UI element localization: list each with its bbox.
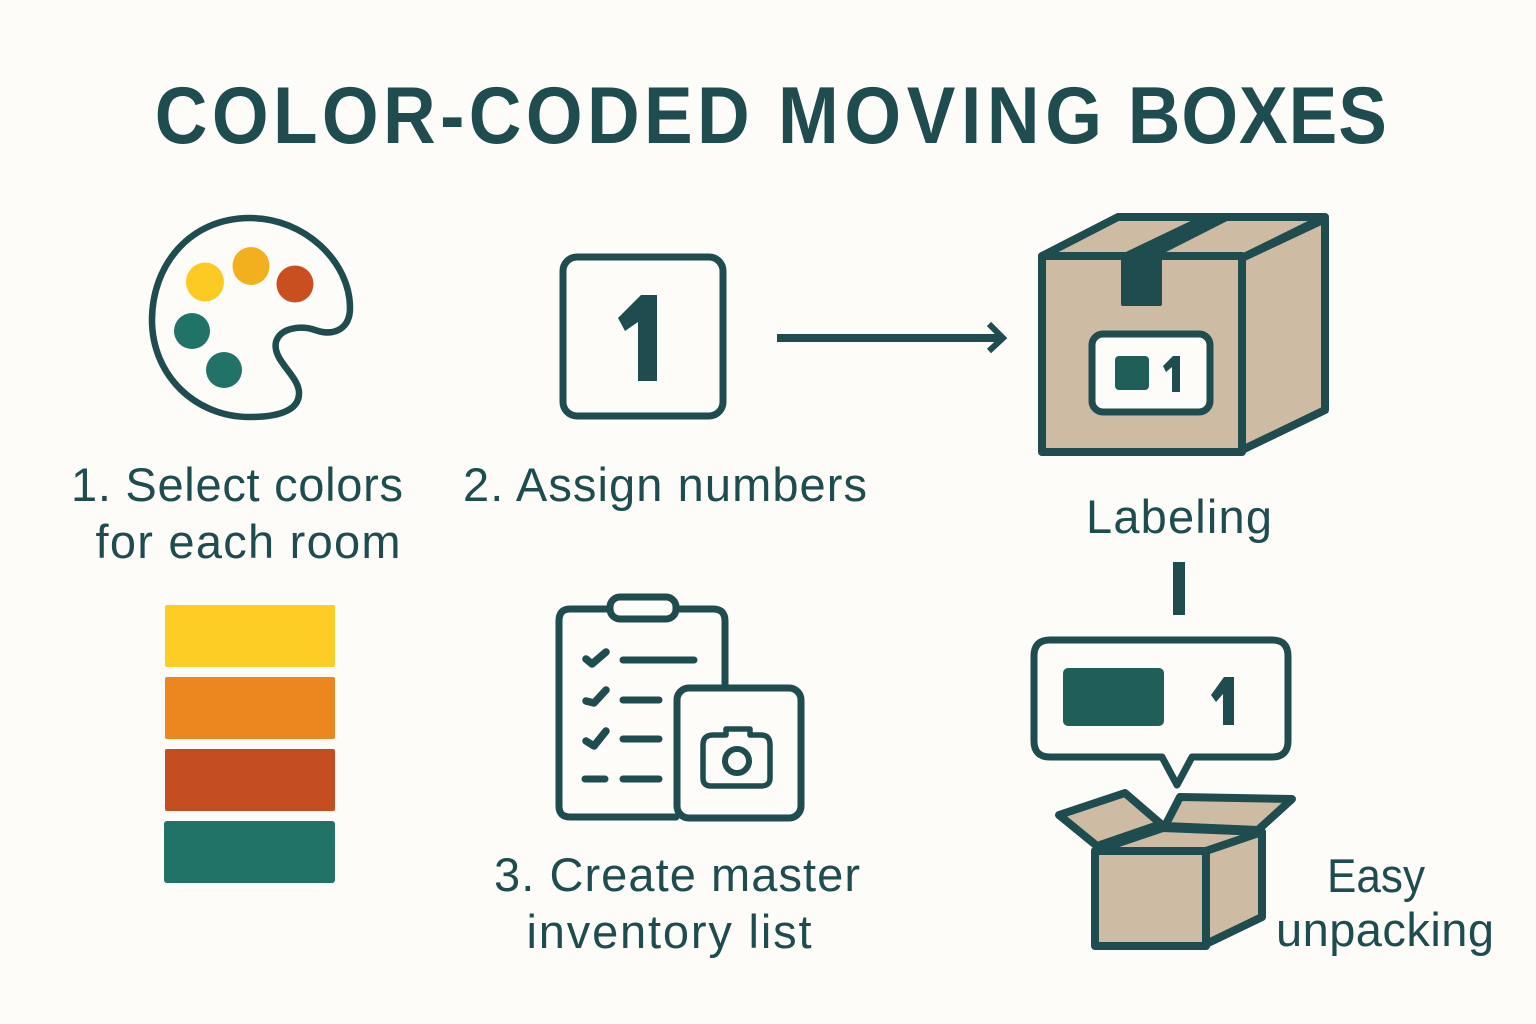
- arrow: [777, 324, 1003, 351]
- text: easy unpacking: [1276, 849, 1494, 956]
- text: step 1: for each room: [96, 515, 400, 568]
- text: step 3: [494, 848, 860, 958]
- icon: palette: [152, 218, 350, 417]
- title: COLOR-CODED: [155, 70, 750, 161]
- icon: clipboard with camera: [559, 597, 801, 818]
- icon: number 1 tile: [563, 257, 723, 416]
- text: step 1: [71, 458, 403, 568]
- text: step 2: 2. Assign numbers: [463, 458, 867, 511]
- text: step 1: 1. Select colors: [71, 458, 403, 511]
- text: easy unpacking: unpacking: [1276, 903, 1494, 956]
- text: step 3: inventory list: [526, 905, 812, 958]
- text: easy unpacking: Easy: [1327, 849, 1425, 902]
- title: [155, 70, 1387, 161]
- connector: [1173, 562, 1185, 615]
- callout: label bubble: [1034, 640, 1288, 785]
- color swatches: [164, 605, 335, 883]
- text: step 3: 3. Create master: [494, 848, 860, 901]
- icon: labeled box: [1042, 217, 1325, 452]
- title: BOXES: [1128, 70, 1387, 161]
- text: labeling: Labeling: [1086, 490, 1272, 543]
- icon: open box: [1059, 793, 1292, 946]
- title: MOVING: [778, 70, 1102, 161]
